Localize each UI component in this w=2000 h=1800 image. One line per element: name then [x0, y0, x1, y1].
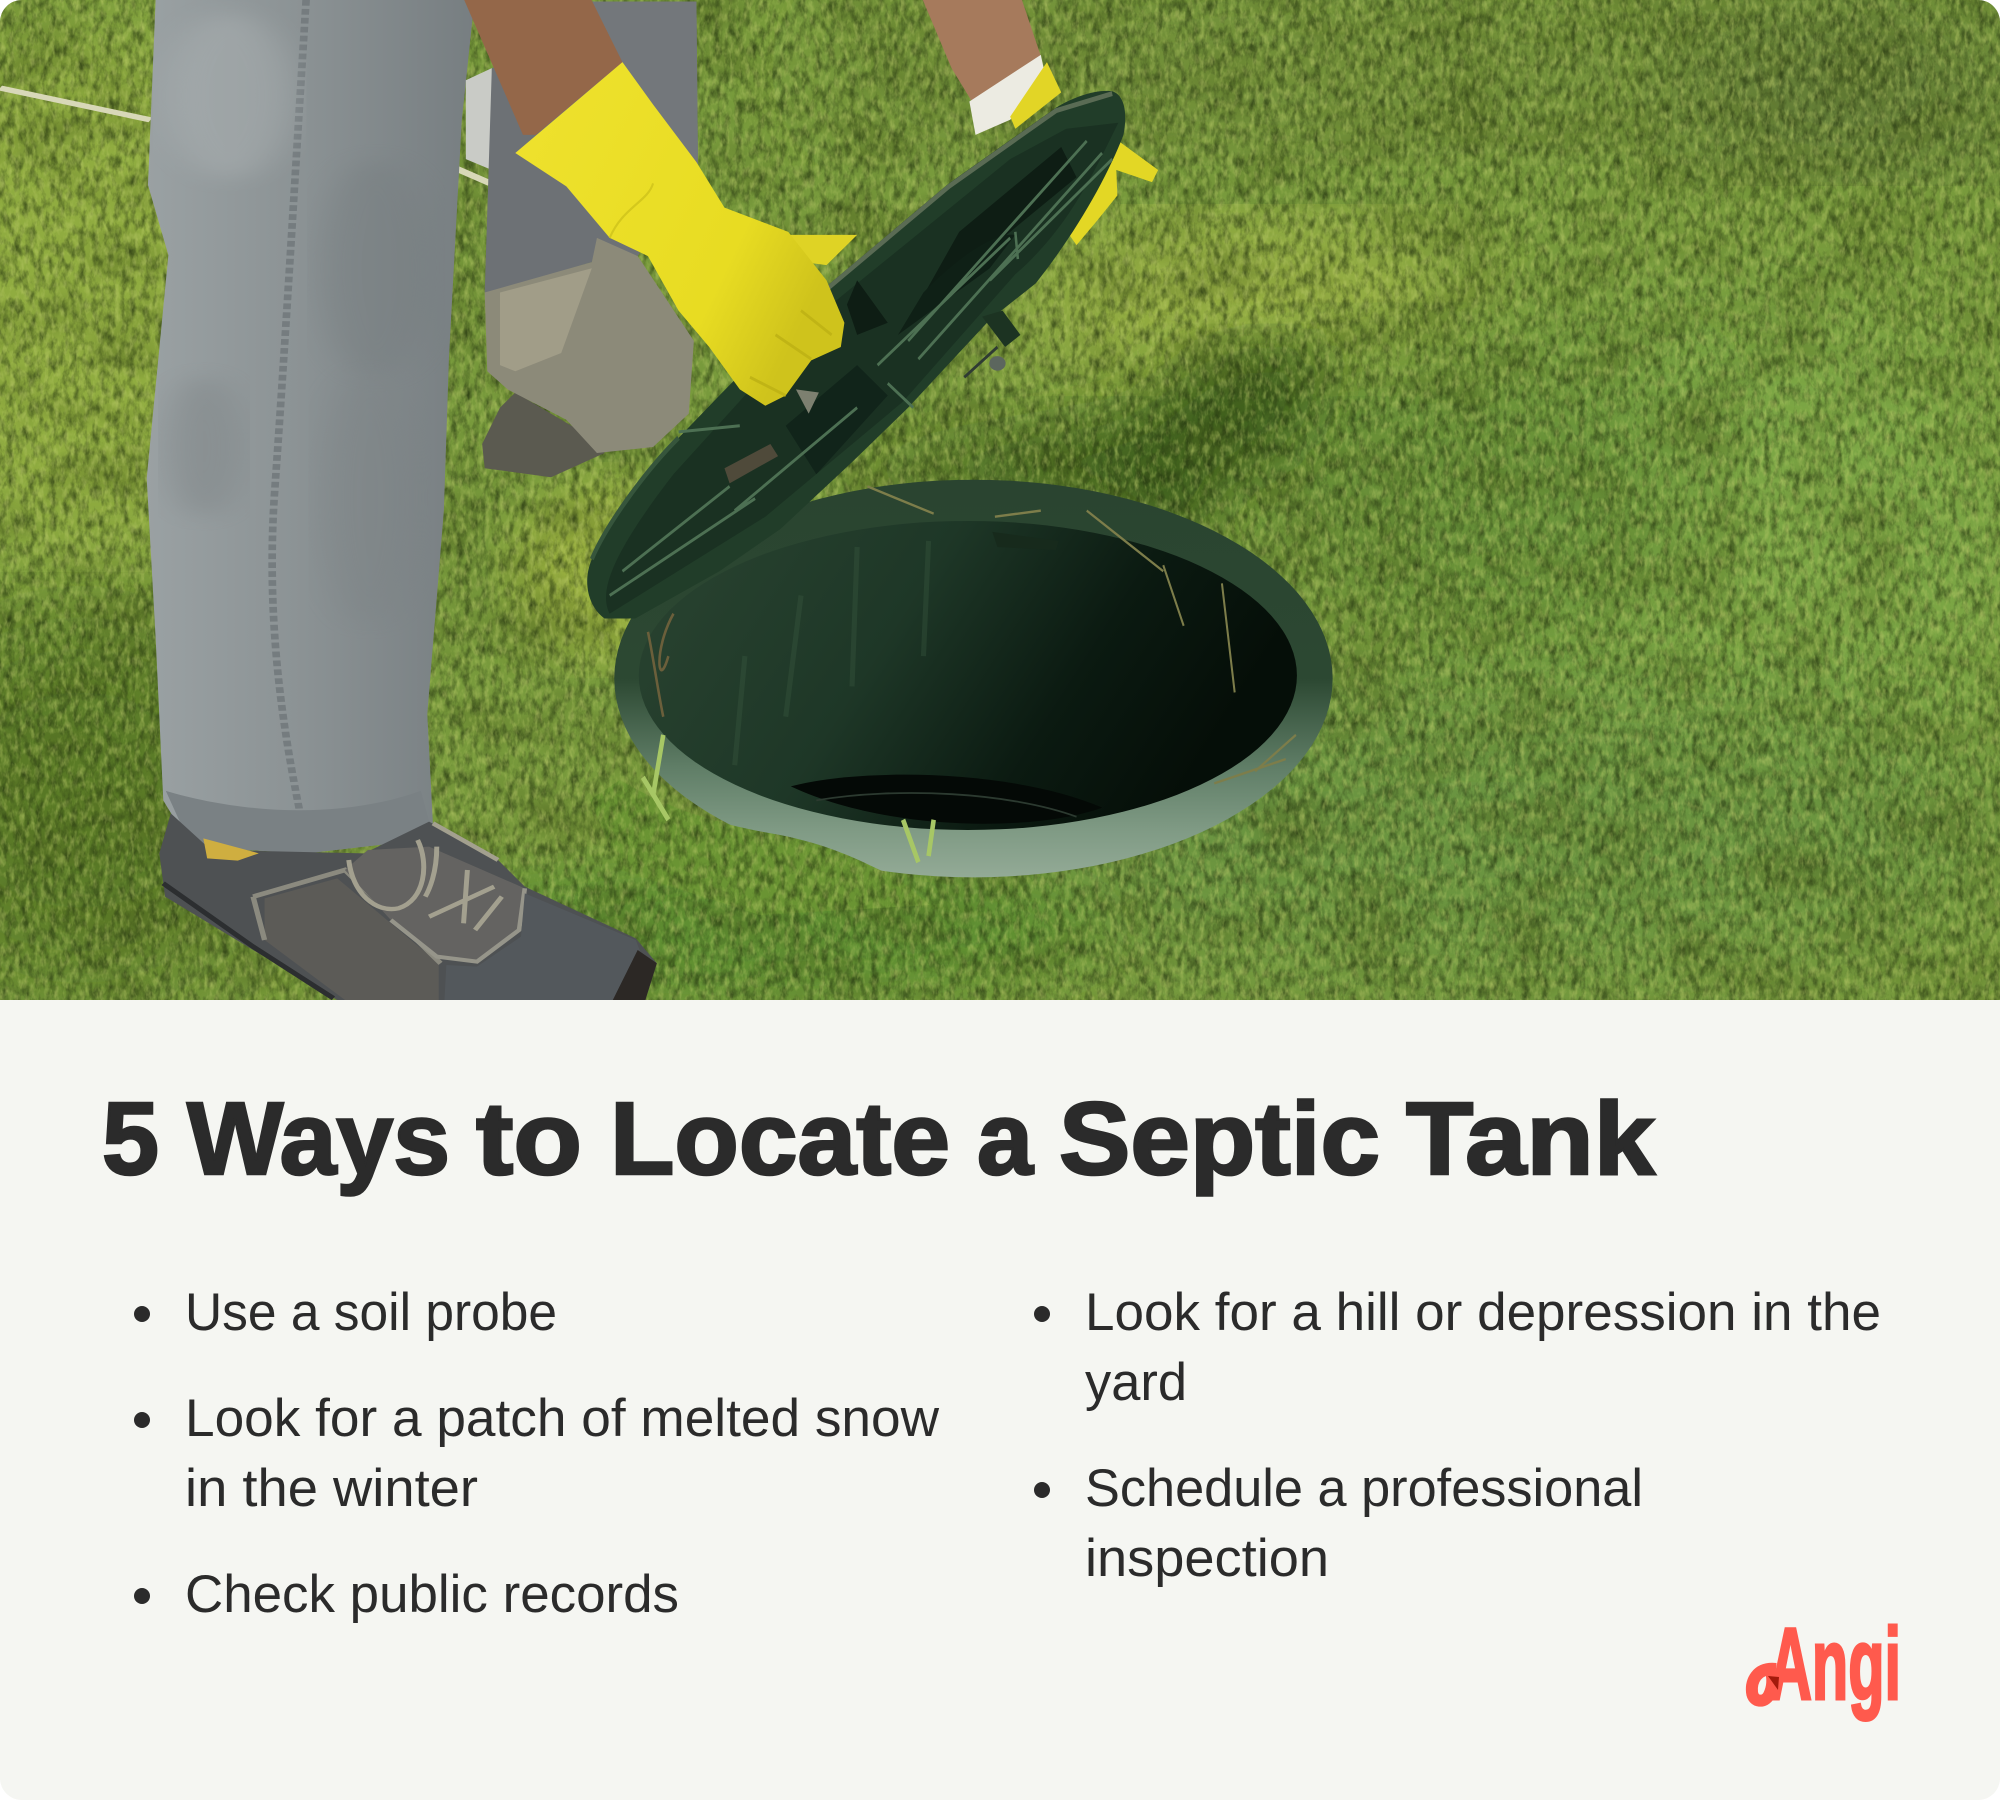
right glove and cuff	[969, 55, 1158, 245]
title: Tank	[1406, 1081, 1656, 1196]
bullet: melted snow: in the winter	[185, 1459, 478, 1518]
title: Ways	[187, 1081, 450, 1196]
title: 5	[102, 1081, 159, 1196]
title: to	[476, 1081, 582, 1196]
left glove thumb	[788, 235, 857, 265]
photo: worker opening a septic tank lid in a lawn	[0, 0, 2000, 1000]
back leg and shoe	[466, 2, 698, 477]
logo: Angi	[1752, 1607, 1901, 1721]
logo: Angi: Angi	[1769, 1607, 1901, 1721]
septic tank lid	[587, 91, 1125, 619]
bullet: professional inspection	[1034, 1459, 1643, 1588]
left yellow glove	[515, 62, 844, 406]
bullet: use a soil probe: Use a soil probe	[185, 1283, 557, 1342]
list: left column	[134, 1283, 940, 1624]
right arm	[921, 0, 1041, 102]
bullet: professional inspection: Schedule a professional	[1085, 1459, 1643, 1518]
title: Locate	[610, 1081, 950, 1196]
bullet: public records: Check public records	[185, 1565, 679, 1624]
rope on the lawn	[0, 88, 491, 184]
front leg trousers	[147, 0, 474, 853]
grass blades over the rim	[643, 735, 934, 862]
bullet: melted snow	[134, 1389, 940, 1518]
title: a	[977, 1081, 1034, 1196]
bullet: hill or depression: yard	[1085, 1353, 1187, 1412]
septic tank riser and opening	[614, 480, 1333, 877]
title: Septic	[1059, 1081, 1380, 1196]
bullet: hill or depression: Look for a hill or depression in the	[1085, 1283, 1881, 1342]
front shoe	[159, 813, 657, 1000]
bullet: professional inspection: inspection	[1085, 1529, 1329, 1588]
bullet: hill or depression	[1034, 1283, 1881, 1412]
left arm	[462, 0, 622, 135]
grass over the rim	[590, 780, 930, 915]
bullet: melted snow: Look for a patch of melted snow	[185, 1389, 940, 1448]
list: right column	[1034, 1283, 1881, 1588]
lawn background	[0, 0, 2000, 1000]
panel: text area	[0, 1000, 2000, 1800]
